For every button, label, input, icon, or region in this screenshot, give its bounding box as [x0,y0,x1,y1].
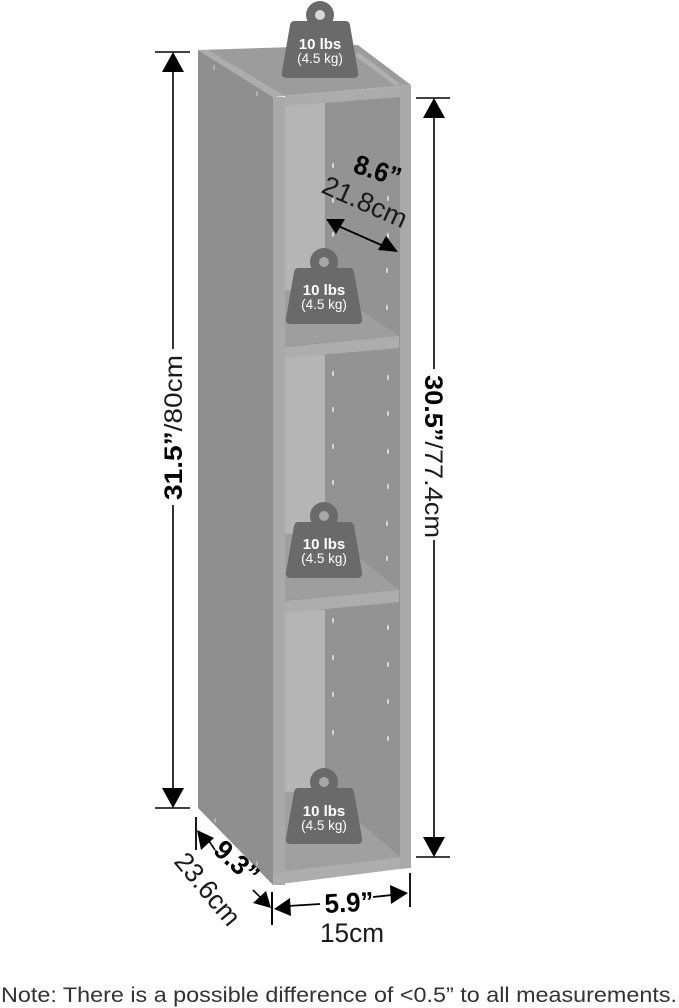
weight icon: middle shelf: (4.5 kg) [301,551,347,566]
dimension: overall height: 31.5”/80cm [160,355,188,500]
dimension: width [272,873,410,948]
weight icon: upper shelf [286,248,362,324]
left side panel [198,50,273,885]
weight icon: bottom shelf: 10 lbs [303,803,345,820]
dimension: width: 5.9” [324,886,374,919]
note: Note: There is a possible difference of <0.5” to all measurements. [1,984,677,1007]
dimension: shelf depth [318,149,412,252]
top surface [198,45,411,97]
bottom shelf [273,792,400,885]
dimension: overall height [155,52,190,808]
dimension: overall depth: 23.6cm [168,847,247,932]
weight icon: middle shelf: 10 lbs [303,536,345,553]
weight icon: upper shelf: 10 lbs [303,282,345,299]
bookcase [198,45,411,885]
peg holes [213,65,389,866]
dimension: inner height: 30.5” /77.4cm [419,375,447,538]
inner lit left wall sections [285,103,325,293]
left front post [273,97,285,885]
upper shelf [284,290,399,358]
dimension: width: 15cm [320,918,384,948]
dimension: overall depth: 9.3” [208,834,265,890]
right front post [400,85,411,869]
weight icon: upper shelf: (4.5 kg) [301,297,347,312]
dimension: shelf depth: 21.8cm [318,170,412,234]
weight icon: bottom shelf: (4.5 kg) [301,818,347,833]
dimension: inner height [416,98,450,857]
inner back panel [285,90,400,870]
middle shelf [284,534,399,613]
weight icon: top [282,1,358,78]
dimension: overall depth [168,817,272,932]
top front rail [285,86,400,106]
dimension: shelf depth: 8.6” [350,149,405,193]
weight icon: top: (4.5 kg) [297,51,343,66]
weight icon: top: 10 lbs [299,36,341,53]
weight icon: bottom shelf [286,768,362,844]
weight icon: middle shelf [286,502,362,578]
